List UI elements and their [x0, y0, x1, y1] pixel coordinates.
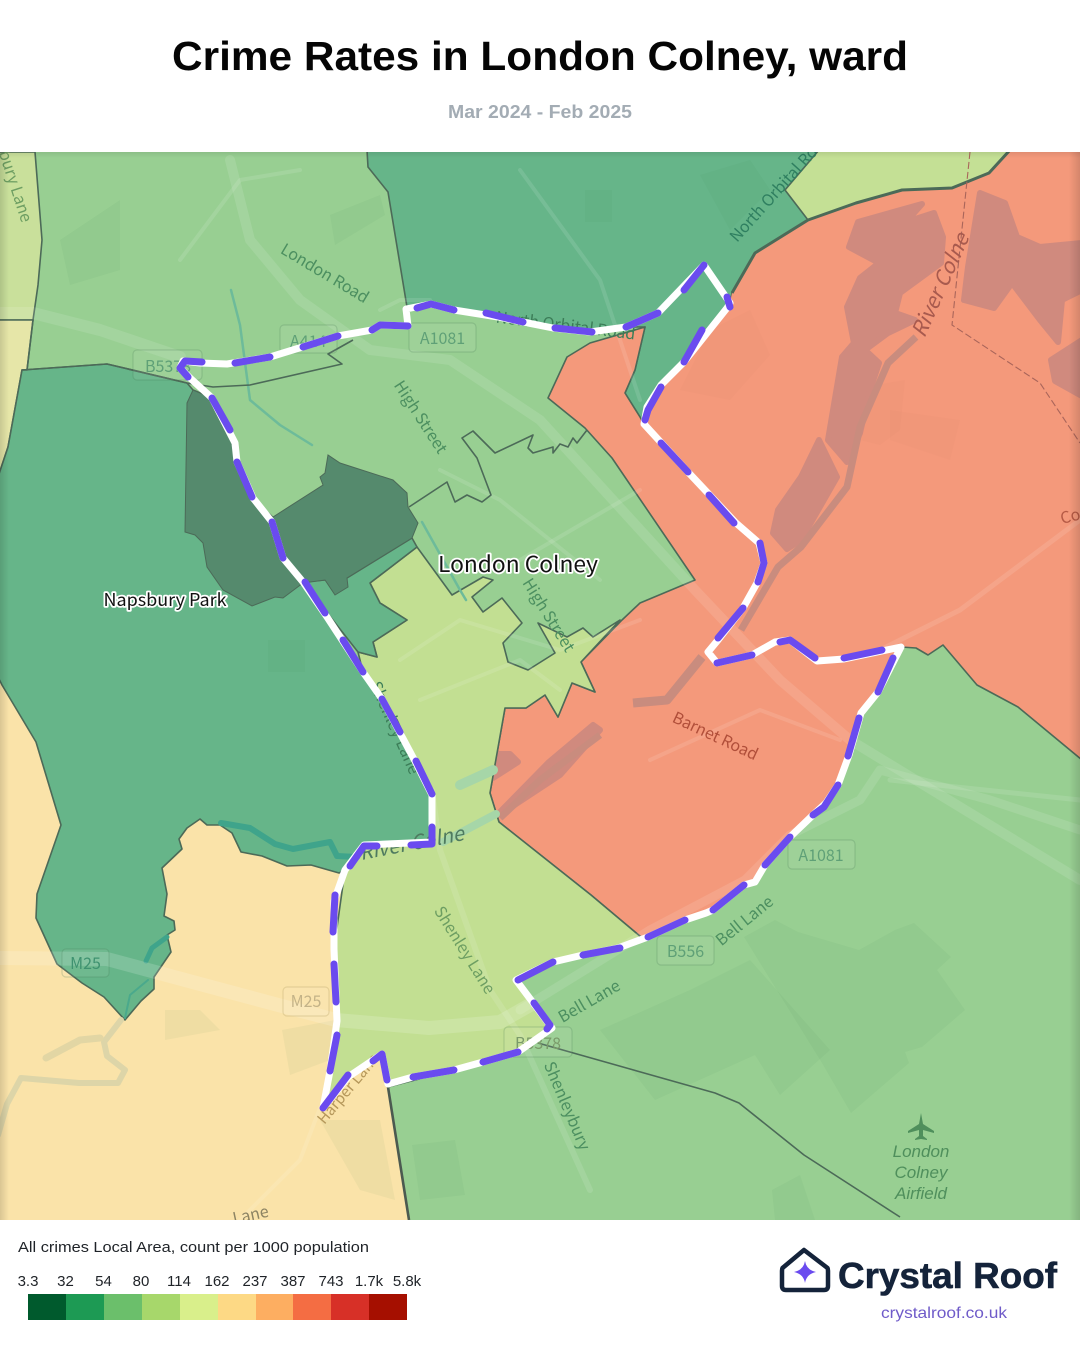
lakes on orange	[493, 193, 1080, 815]
label: London Colney Airfield: London	[893, 1142, 949, 1161]
road sign: B5378 north	[133, 350, 202, 380]
area: mid green patch	[303, 538, 417, 657]
icon: airfield plane	[908, 1113, 934, 1140]
legend tick labels: 80	[133, 1273, 149, 1290]
road sign: B556: B556	[667, 938, 704, 962]
legend tick labels: 114	[167, 1273, 191, 1290]
label: River Colne east: River Colne	[903, 226, 977, 342]
legend title: All crimes Local Area, count per 1000 population	[18, 1239, 369, 1256]
label: North Orbital Road east: North Orbital Road	[723, 126, 835, 246]
boundary: internal ward line	[409, 430, 587, 507]
map edge vignette	[0, 152, 1080, 1220]
label: London Colney Airfield: Airfield	[894, 1184, 948, 1203]
legend tick labels: 54	[95, 1273, 112, 1290]
road sign: B556	[657, 936, 714, 965]
river on green	[0, 290, 496, 1135]
label: High Street north: High Street	[389, 375, 455, 458]
area: orange east	[644, 150, 1080, 760]
area: pale strip west	[0, 320, 33, 480]
label: Lane (cut off): Lane	[230, 1198, 271, 1229]
label: Bell Lane west: Bell Lane	[553, 972, 624, 1027]
logo url: crystalroof.co.uk	[881, 1305, 1008, 1322]
label: Harper Lane: Harper Lane	[312, 1049, 383, 1128]
logo wordmark: Crystal Roof	[838, 1255, 1058, 1296]
label: Napsbury Park: Napsbury Park	[104, 587, 227, 612]
legend tick labels	[18, 1273, 422, 1290]
legend	[18, 1239, 422, 1320]
road sign: B5378 south: B5378	[515, 1030, 561, 1054]
label: Shenley Lane north: Shenley Lane	[365, 677, 428, 778]
ward boundary: white casing with purple dashes	[180, 265, 901, 1108]
label: London Colney Airfield: Colney	[895, 1163, 949, 1182]
label: Shenleybury: Shenleybury	[539, 1057, 598, 1154]
road sign: A1081 south: A1081	[798, 842, 844, 866]
legend tick labels: 32	[57, 1273, 74, 1290]
label: North Orbital Road on ward: North Orbital Road	[495, 304, 637, 345]
road sign: M25 central	[283, 987, 329, 1016]
label: River Colne south: River Colne	[357, 817, 468, 866]
legend tick labels: 237	[242, 1273, 268, 1290]
legend tick labels: 162	[204, 1273, 230, 1290]
label: London Colney: London Colney	[438, 547, 599, 579]
title: Crime Rates in London Colney, ward	[172, 33, 908, 79]
road sign: A1081 north: A1081	[420, 325, 465, 349]
fields and patches	[165, 991, 830, 1200]
road sign: M25 west: M25	[70, 950, 101, 974]
boundary: east of light green	[538, 1043, 900, 1217]
area: orange central	[490, 327, 901, 937]
label: High Street south: High Street	[518, 573, 582, 656]
legend colour scale	[28, 1294, 407, 1320]
label: Barnet Road: Barnet Road	[669, 704, 763, 765]
label: Shenley Lane south: Shenley Lane	[429, 901, 503, 998]
area: lime central	[323, 547, 648, 1108]
legend tick labels: 1.7k	[355, 1273, 384, 1290]
subtitle: date range: Mar 2024 - Feb 2025	[448, 101, 632, 122]
fields on orange	[680, 310, 960, 460]
area: light green base	[0, 152, 1080, 1220]
label: London Colney Airfield	[893, 1142, 949, 1203]
legend tick labels: 387	[280, 1273, 306, 1290]
road sign: A414	[280, 325, 337, 353]
area: lime north-west strip	[0, 152, 42, 320]
legend tick labels: 3.3	[18, 1273, 38, 1290]
area: cream south-west	[0, 680, 409, 1220]
logo: Crystal Roof	[782, 1250, 1058, 1322]
road sign: M25 central: M25	[291, 988, 321, 1012]
road sign: M25 west	[62, 949, 109, 977]
area: mid green north	[367, 150, 819, 424]
road sign: A1081 north	[409, 323, 476, 352]
boundary: south-west thick edge	[388, 1087, 409, 1220]
road sign: B5378 north: B5378	[145, 353, 191, 377]
legend tick labels: 743	[318, 1273, 344, 1290]
road sign: A414: A414	[290, 328, 326, 352]
area: dark green hot-spot	[185, 390, 418, 606]
area: lime north-east	[785, 150, 1010, 220]
boundary: orange east edges	[732, 150, 1080, 760]
area: mid green west	[0, 364, 432, 1020]
road sign: A1081 south	[788, 840, 855, 869]
label: Bell Lane east: Bell Lane	[709, 889, 778, 950]
river on orange	[500, 337, 916, 818]
label: London Road: London Road	[277, 236, 374, 308]
boundary: west light-green edge	[22, 320, 353, 387]
railway line	[952, 152, 1080, 443]
icon: house with star	[782, 1250, 828, 1290]
roads	[0, 160, 1080, 1220]
road sign: B5378 south	[504, 1027, 572, 1057]
legend tick labels: 5.8k	[393, 1273, 422, 1290]
